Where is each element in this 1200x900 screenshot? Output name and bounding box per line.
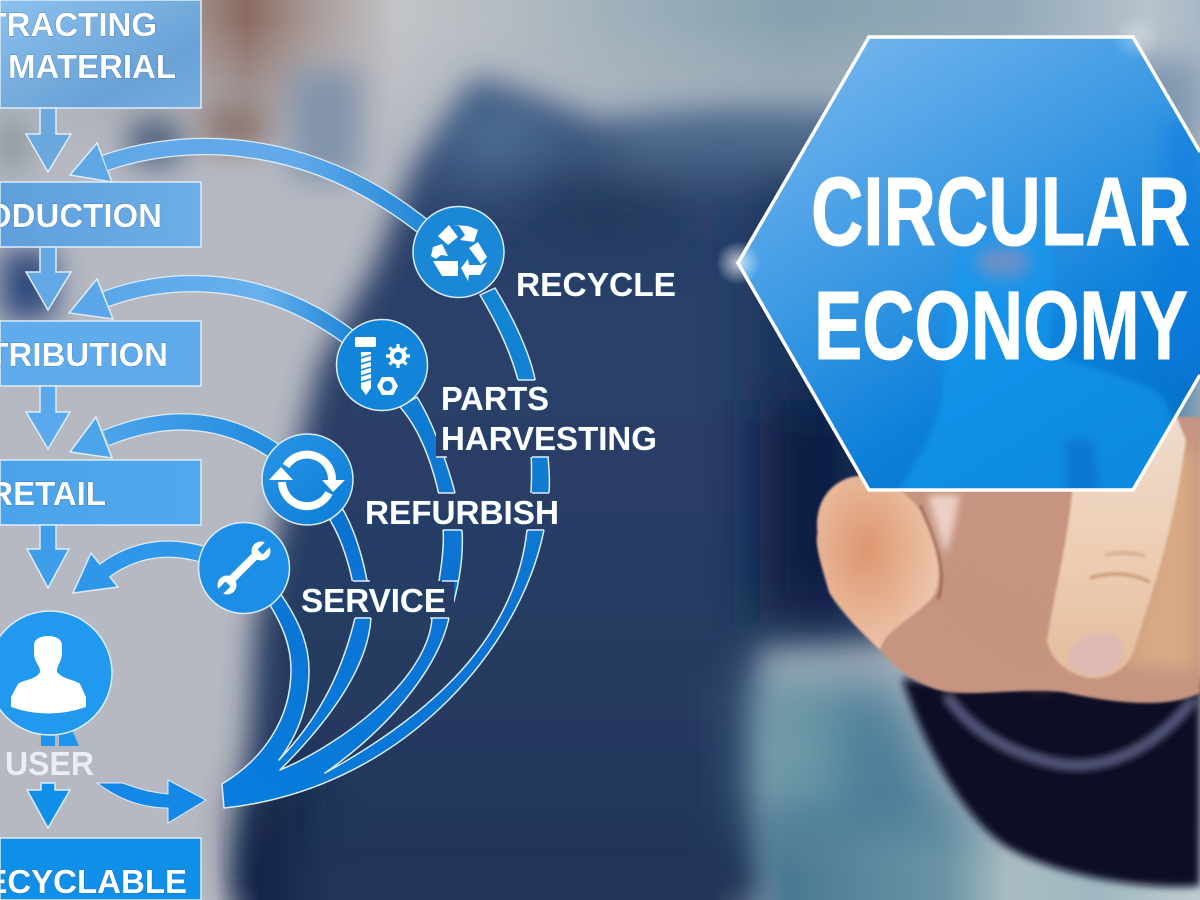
box: production	[0, 182, 201, 247]
return arrow: parts harvesting to distribution	[69, 279, 350, 338]
icon: parts harvesting	[336, 320, 428, 410]
bolt	[355, 337, 376, 395]
label: parts harvesting: PARTS	[441, 380, 549, 417]
box: retail	[0, 460, 201, 525]
hexagon title	[811, 157, 1190, 380]
thumb	[817, 476, 939, 650]
label: parts harvesting	[441, 380, 657, 457]
photo: sleeve	[902, 678, 1200, 887]
top band	[99, 0, 1200, 138]
arrow: user to reuse hub	[97, 780, 206, 823]
icon: user	[0, 611, 112, 735]
nut	[377, 377, 398, 395]
box: extracting raw material	[0, 0, 201, 108]
flow chain: boxes and down arrows	[0, 0, 201, 900]
return arrow: recycle to production	[70, 143, 430, 232]
arrow: to distribution	[26, 247, 71, 310]
box: distribution	[0, 321, 201, 386]
label: user: USER	[5, 745, 94, 782]
icon: recycle	[413, 206, 504, 298]
finger reflection inside hexagon	[897, 120, 1200, 495]
suit	[240, 78, 900, 900]
fingernail	[1068, 633, 1123, 676]
arrow: to user	[27, 525, 69, 588]
return arrow: refurbish to retail	[70, 417, 280, 458]
glow at left vertex	[716, 241, 760, 285]
icon: service wrench	[198, 522, 290, 614]
photo: hand	[817, 415, 1200, 703]
box: recyclable	[0, 838, 201, 900]
label: recycle: RECYCLE	[516, 266, 676, 303]
gear	[386, 344, 410, 368]
arrow: to retail	[26, 386, 70, 449]
icon: refurbish	[262, 434, 353, 525]
arrow: to production	[26, 108, 71, 172]
arrow: user to recyclable	[27, 783, 70, 828]
glow at top right vertex	[1112, 13, 1160, 61]
return fan of curved bands	[222, 288, 549, 808]
label: parts harvesting: HARVESTING	[441, 420, 657, 457]
pointing finger	[1047, 415, 1186, 678]
hexagon badge	[716, 13, 1200, 495]
return arrow: service to user	[73, 549, 205, 593]
label: service: SERVICE	[301, 582, 446, 619]
user stubs under circle	[41, 730, 79, 746]
label: refurbish: REFURBISH	[365, 494, 559, 531]
bottom edge strips	[218, 806, 1200, 900]
